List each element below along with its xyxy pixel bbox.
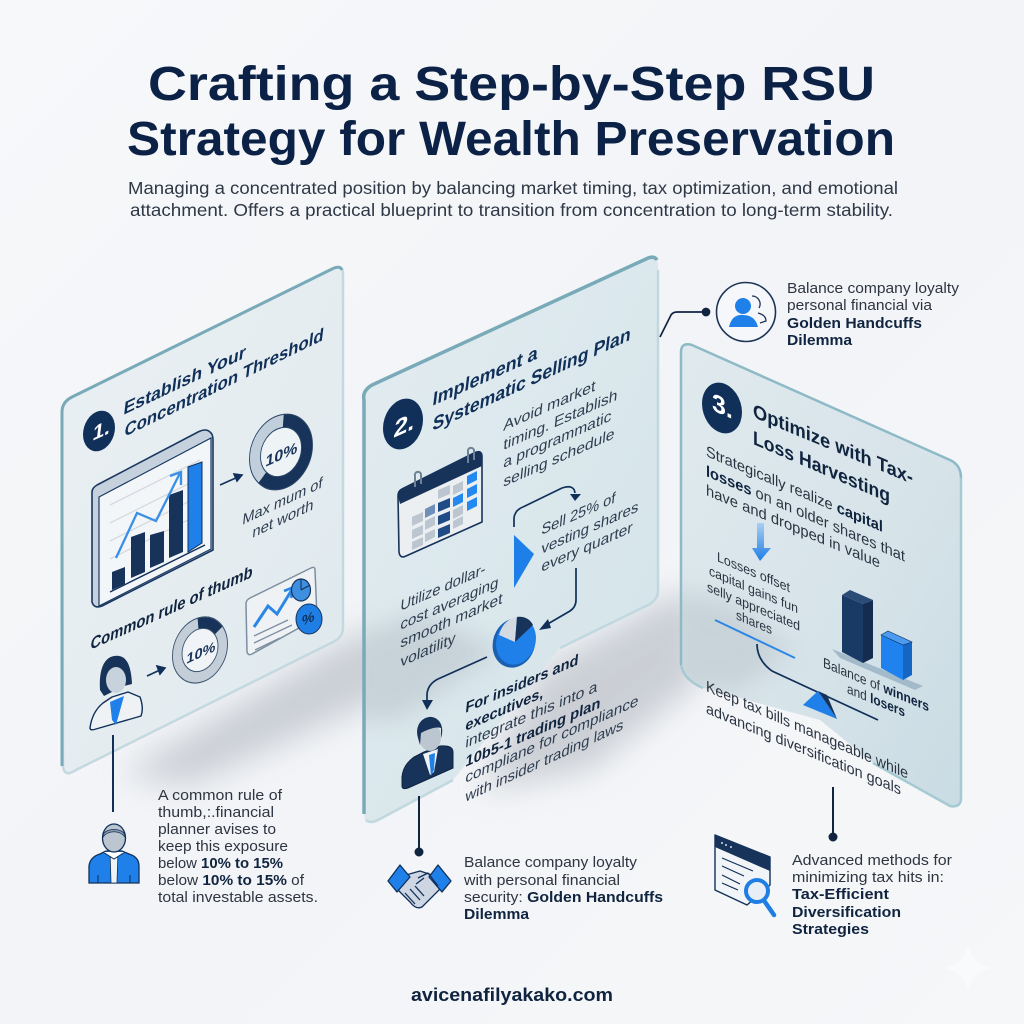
text: avoid market timing: a programmatic <box>503 407 612 472</box>
connector: panel 3 to search icon <box>830 787 836 840</box>
donut: 10% small <box>172 612 228 688</box>
text: insiders and executives: executives, <box>465 684 544 735</box>
step number 3: 3. <box>712 387 733 425</box>
text: rule of thumb: A common rule of <box>158 787 283 804</box>
text: tax-efficient diversification: minimizing tax hits in: <box>792 869 944 886</box>
heading 3: Loss Harvesting <box>753 428 890 508</box>
text: realize capital losses: Strategically realize capital <box>706 443 883 536</box>
icon: bar chart board <box>92 430 213 607</box>
text: insiders and executives <box>464 651 639 806</box>
donut: 10% small: 10% <box>186 638 217 668</box>
text: keep tax bills manageable: Keep tax bills manageable while <box>706 678 908 783</box>
text: balance loyalty: Dilemma <box>464 906 530 923</box>
icon: woman adviser <box>90 656 142 730</box>
text: losses offset: capital gains fun <box>709 563 798 616</box>
text: insiders and executives: For insiders and <box>465 651 579 717</box>
connector: panel 2 to callout <box>660 308 710 337</box>
donut: 10% <box>250 408 312 496</box>
text: tax-efficient diversification: Tax-Efficient <box>792 886 889 903</box>
icon: pie chart <box>486 612 542 673</box>
connector: panel 2 to handshake <box>416 796 422 856</box>
caption: maximum of net worth: net worth <box>252 496 314 542</box>
text: losses offset: shares <box>736 607 772 637</box>
step number 2 <box>383 395 423 453</box>
text: sell 25%: Sell 25% of <box>541 489 617 539</box>
callout: loyalty top: Golden Handcuffs <box>787 315 922 332</box>
subheading: Common rule of thumb <box>90 561 254 654</box>
text: losses offset: selly appreciated <box>707 579 800 634</box>
text: balance loyalty: Balance company loyalty <box>464 854 638 871</box>
text: losses offset: Losses offset <box>717 549 790 595</box>
panel 2: selling plan <box>345 257 658 823</box>
text: losses offset <box>707 549 800 637</box>
arrow <box>220 474 242 485</box>
arrow <box>147 666 165 676</box>
text: rule of thumb: total investable assets. <box>158 889 318 906</box>
text: tax-efficient diversification: Strategies <box>792 921 869 938</box>
donut: 10%: 10% <box>265 438 298 471</box>
panel shadows <box>120 590 700 790</box>
step number 1: 1. <box>91 414 112 446</box>
text: tax-efficient diversification: Advanced methods for <box>792 852 952 869</box>
text: sell 25%: vesting shares <box>541 498 639 558</box>
text: rule of thumb <box>158 787 318 906</box>
subtitle <box>128 178 898 220</box>
step number 2: 2. <box>392 406 417 444</box>
icon: report card with percent <box>246 567 322 655</box>
text: avoid market timing: timing. Establish <box>503 387 618 454</box>
heading 2: Implement a <box>431 341 540 411</box>
icon: businessman bottom-left <box>89 824 139 883</box>
heading 3: Optimize with Tax- <box>753 401 913 489</box>
text: avoid market timing: Avoid market <box>503 377 597 435</box>
title <box>127 58 895 166</box>
text: dollar-cost averaging: Utilize dollar- <box>400 560 486 615</box>
connector line <box>112 735 114 812</box>
text: sell 25% <box>541 489 639 576</box>
panel 3: tax-loss harvesting <box>670 344 962 807</box>
text: keep tax bills manageable: advancing diversification goals <box>706 700 901 799</box>
caption: balance of winners and losers: and losers <box>847 681 905 721</box>
step number 1 <box>83 407 115 455</box>
footer url: avicenafilyakako.com <box>411 985 613 1005</box>
text: balance loyalty: security: Golden Handcuffs <box>464 889 663 906</box>
text: rule of thumb: below 10% to 15% <box>158 855 283 872</box>
title: Crafting a Step-by-Step RSU <box>148 58 875 111</box>
icon: people circle <box>716 282 776 342</box>
text: realize capital losses: have and dropped in value <box>706 482 880 572</box>
callout: loyalty top: personal financial via <box>787 297 933 314</box>
caption: balance of winners and losers: Balance of winners <box>823 655 929 715</box>
text: avoid market timing <box>503 377 618 491</box>
arrow: curve to sell <box>514 487 581 527</box>
heading 2: Systematic Selling Plan <box>431 323 632 436</box>
arrow: to pie <box>539 568 576 630</box>
chart: winners and losers bars <box>832 590 923 690</box>
text: rule of thumb: below 10% to 15% of <box>158 872 305 889</box>
text: tax-efficient diversification: Diversification <box>792 904 901 921</box>
callout: loyalty top <box>787 280 960 349</box>
subtitle: Managing a concentrated position by balancing market timing, tax optimization, and emotional <box>128 178 898 198</box>
icon: balance scale <box>715 620 878 720</box>
text: sell 25%: every quarter <box>541 518 634 576</box>
arrow: blue down <box>752 523 771 561</box>
text: balance loyalty: with personal financial <box>463 872 620 889</box>
icon: document with magnifier <box>715 835 774 915</box>
text: insiders and executives: with insider trading laws <box>464 716 624 806</box>
title: Strategy for Wealth Preservation <box>127 113 895 166</box>
heading 1: Establish Your <box>122 341 247 420</box>
icon: calendar <box>398 448 482 557</box>
caption: maximum of net worth: Max mum of <box>242 474 324 529</box>
text: dollar-cost averaging <box>400 560 504 671</box>
icon: sparkle <box>944 944 992 992</box>
text: dollar-cost averaging: volatility <box>400 629 457 671</box>
panel 1: concentration threshold <box>62 267 343 812</box>
icon: blue triangle <box>514 535 534 588</box>
text: dollar-cost averaging: smooth market <box>400 590 504 652</box>
text: rule of thumb: keep this exposure <box>158 838 288 855</box>
text: insiders and executives: compliane for compliance <box>465 692 639 787</box>
text: dollar-cost averaging: cost averaging <box>400 574 499 634</box>
arrow: to executive <box>422 657 487 710</box>
text: tax-efficient diversification <box>792 852 952 938</box>
subtitle: attachment. Offers a practical blueprint to transition from concentration to long-term stability. <box>130 200 893 220</box>
text: avoid market timing: selling schedule <box>503 425 615 491</box>
text: balance loyalty <box>463 854 663 923</box>
text: rule of thumb: planner avises to <box>158 821 276 838</box>
step number 3 <box>702 379 742 437</box>
icon: executive <box>402 717 453 789</box>
heading 1: Concentration Threshold <box>123 324 325 442</box>
text: realize capital losses: losses on an older shares that <box>706 463 905 566</box>
text: insiders and executives: integrate this into a <box>465 677 599 752</box>
callout: loyalty top: Dilemma <box>787 332 853 349</box>
callout: loyalty top: Balance company loyalty <box>787 280 960 297</box>
icon: report card with percent: % <box>302 609 314 630</box>
icon: handshake <box>388 865 451 908</box>
text: insiders and executives: 10b5-1 trading plan <box>465 694 601 771</box>
text: rule of thumb: thumb,:.financial <box>158 804 274 821</box>
